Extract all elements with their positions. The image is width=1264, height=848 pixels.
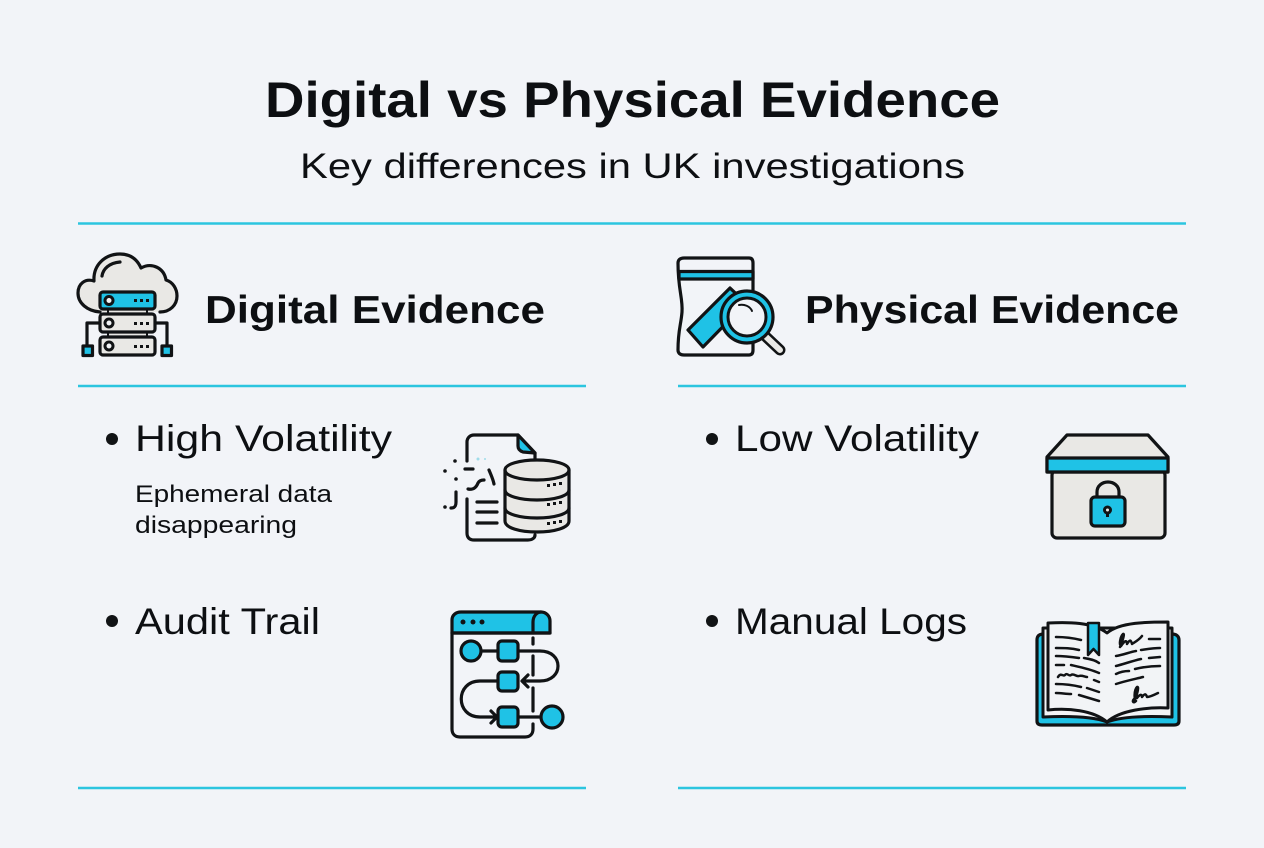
icon: open logbook	[1037, 622, 1179, 725]
description: ephemeral data: disappearing	[135, 512, 297, 539]
icon: audit flow window	[452, 612, 563, 737]
heading: digital evidence: Digital Evidence	[205, 289, 545, 332]
icon: locked box	[1047, 435, 1168, 538]
bullet: audit trail: Audit Trail	[135, 601, 320, 642]
description: ephemeral data: Ephemeral data	[135, 481, 333, 508]
icon: evidence bag with magnifier	[678, 258, 780, 355]
description: ephemeral data	[135, 481, 333, 539]
bullet: low volatility: Low Volatility	[735, 418, 980, 459]
title: Digital vs Physical Evidence	[265, 72, 1000, 128]
panel: digital evidence	[78, 254, 569, 737]
subtitle: Key differences in UK investigations	[300, 147, 965, 186]
icon: cloud server	[78, 254, 177, 356]
bullet: manual logs: Manual Logs	[735, 601, 967, 642]
panel: physical evidence	[678, 258, 1179, 725]
icon: file and database	[443, 435, 569, 540]
bullet: high volatility: High Volatility	[135, 418, 393, 459]
heading: physical evidence: Physical Evidence	[805, 289, 1179, 332]
